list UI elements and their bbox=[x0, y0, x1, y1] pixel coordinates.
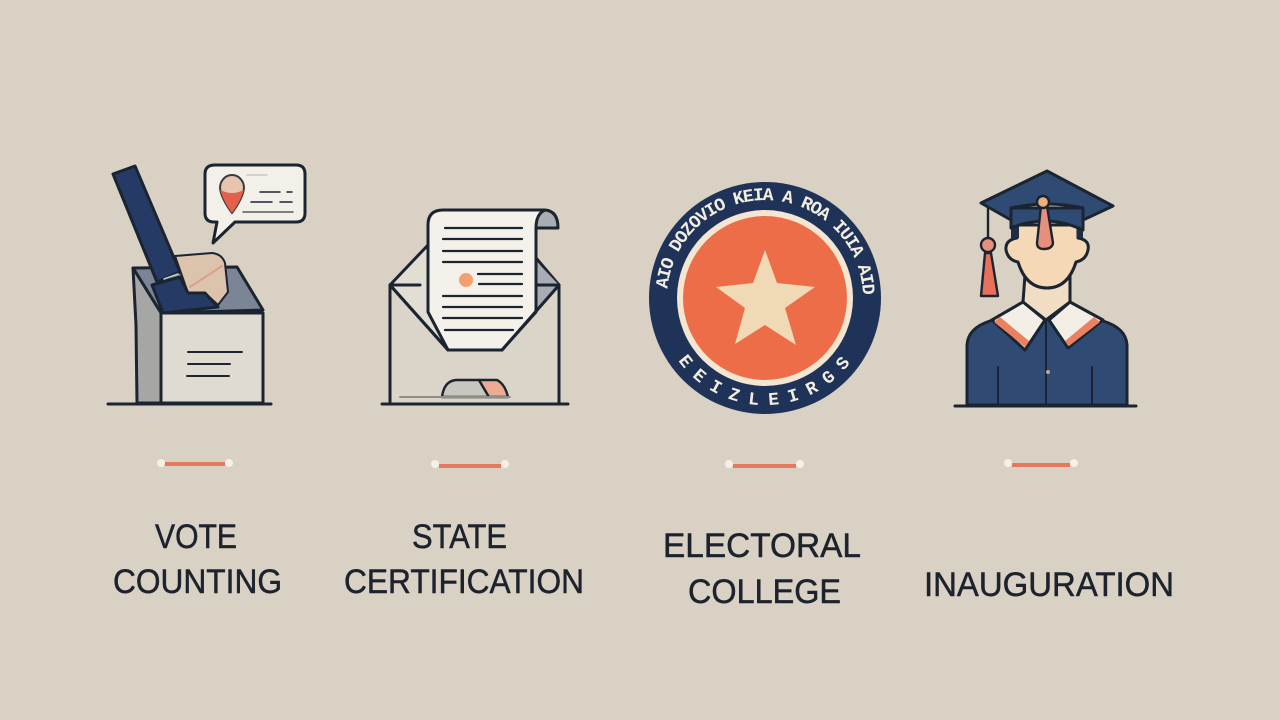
label: electoral college: COLLEGE bbox=[688, 573, 841, 611]
icon: map pin bbox=[220, 175, 244, 213]
label: inauguration: INAUGURATION bbox=[924, 566, 1174, 604]
envelope front edges bbox=[390, 285, 559, 350]
seal text top: AIO DOZOVIO KEIA A ROA IUIA AID bbox=[656, 188, 874, 294]
connector dash 4 bbox=[1004, 459, 1078, 467]
envelope back flap bbox=[390, 245, 559, 350]
seal cream ring bbox=[677, 210, 853, 386]
certificate paper bbox=[428, 210, 545, 350]
ballot box interior bbox=[133, 267, 263, 313]
ballot paper bbox=[175, 253, 228, 305]
envelope body bbox=[390, 285, 559, 404]
neck bbox=[1023, 275, 1070, 320]
mortarboard top bbox=[981, 171, 1113, 220]
label: electoral college: ELECTORAL bbox=[663, 527, 861, 565]
ballot box side bbox=[133, 268, 161, 403]
pen bbox=[113, 166, 218, 313]
icon: electoral college seal bbox=[649, 182, 881, 414]
hair bbox=[1011, 210, 1083, 238]
connector dash 2 bbox=[431, 460, 509, 468]
label: vote counting: COUNTING bbox=[113, 563, 282, 601]
label: state certification: STATE bbox=[412, 518, 507, 556]
paper curl bbox=[530, 210, 558, 228]
connector dash 3 bbox=[725, 460, 804, 468]
label: state certification: CERTIFICATION bbox=[344, 563, 584, 601]
speech bubble bbox=[205, 165, 305, 243]
star bbox=[716, 250, 815, 345]
gown bbox=[967, 302, 1127, 405]
label: state certification bbox=[344, 518, 584, 601]
mortarboard band bbox=[1011, 208, 1083, 230]
label: vote counting bbox=[113, 518, 282, 601]
seal outer ring bbox=[649, 182, 881, 414]
connector dash 1 bbox=[157, 459, 233, 467]
ballot box front bbox=[161, 313, 263, 403]
small seal tab bbox=[400, 380, 510, 397]
collar right bbox=[1049, 302, 1103, 348]
seal text bottom: EEIZLEIRGS bbox=[678, 354, 849, 405]
envelope inner shade bbox=[537, 262, 559, 312]
ground line bbox=[382, 402, 568, 406]
icon: envelope with certificate bbox=[382, 210, 568, 404]
ground line bbox=[108, 402, 271, 406]
head bbox=[1006, 225, 1088, 288]
collar left bbox=[992, 302, 1045, 350]
side tassel bbox=[981, 207, 998, 296]
seal orange disc bbox=[683, 216, 847, 380]
icon: ballot box with pen and speech bubble bbox=[108, 165, 305, 404]
label: electoral college bbox=[663, 527, 861, 611]
label: vote counting: VOTE bbox=[155, 518, 237, 556]
center tassel bbox=[1037, 196, 1053, 249]
icon: graduate with cap bbox=[955, 171, 1136, 406]
ground line bbox=[955, 404, 1136, 408]
